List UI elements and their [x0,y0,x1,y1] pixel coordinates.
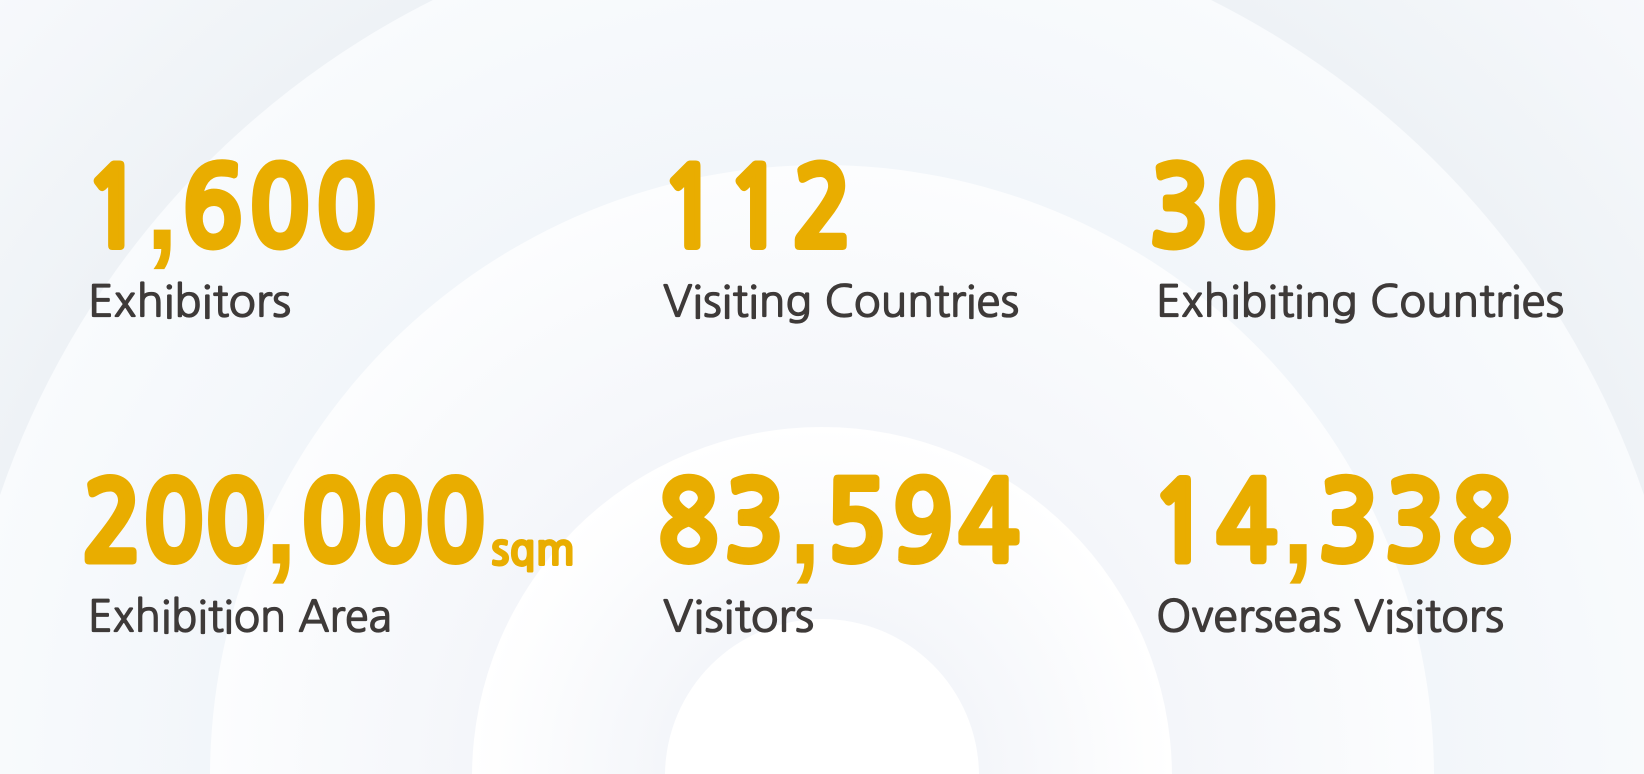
number: 112: 112 [659,154,853,263]
number: 83,594: , [788,447,822,592]
label: Exhibiting Countries: Exhibiting Countries [1156,280,1564,324]
stat: visitors [658,447,1020,638]
stat: visiting countries [659,154,1019,324]
unit: sqm: sqm [491,528,575,572]
stat: exhibition area [82,447,575,638]
label: Overseas Visitors: Overseas Visitors [1156,596,1504,638]
number: 200,000: 200 [82,468,266,578]
label: Visiting Countries: Visiting Countries [663,280,1019,324]
number: 200,000: , [264,447,298,592]
number: 14,338: , [1281,447,1315,592]
number: 1,600: 600 [182,154,377,263]
number: 200,000: 000 [301,468,486,578]
number: 83,594: 83 [658,468,785,578]
number: 14,338: 14 [1150,468,1278,578]
stat: exhibitors [83,132,377,324]
number: 14,338: 338 [1318,468,1513,578]
number: 1,600: , [145,132,179,277]
number: 30: 30 [1149,154,1278,263]
number: 1,600: 1 [83,154,145,263]
stat: exhibiting countries [1149,154,1564,324]
label: Exhibitors: Exhibitors [88,280,291,324]
stat: overseas visitors [1150,447,1513,638]
number: 83,594: 594 [825,468,1020,578]
label: Exhibition Area: Exhibition Area [88,596,392,638]
label: Visitors: Visitors [663,596,814,638]
